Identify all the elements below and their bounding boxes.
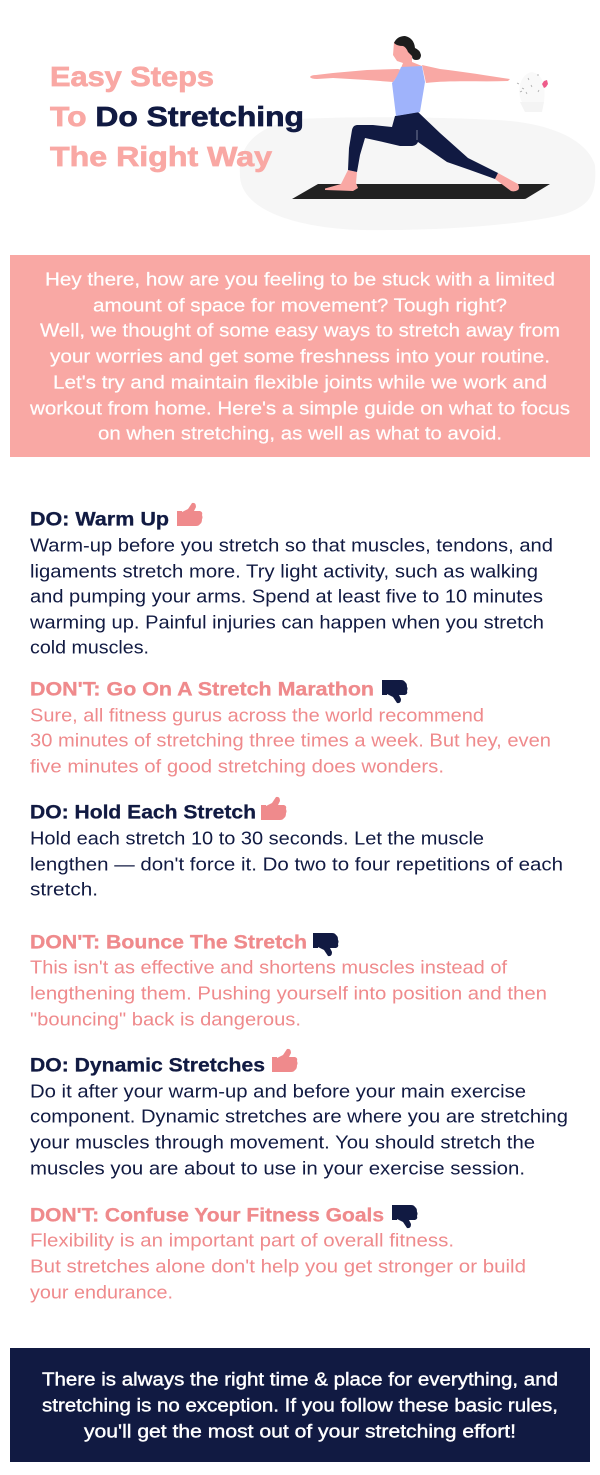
body text: ligaments stretch more. Try light activity, such as walking xyxy=(30,561,538,582)
conclusion text: There is always the right time & place for everything, and xyxy=(42,1369,558,1390)
icon: thumbs down xyxy=(382,680,408,703)
body text: lengthening them. Pushing yourself into position and then xyxy=(30,983,547,1004)
heading: DO: Hold Each Stretch xyxy=(30,802,256,824)
title: Easy Steps xyxy=(50,61,214,92)
icon: thumbs up xyxy=(261,797,286,820)
heading: DON'T: Go On A Stretch Marathon xyxy=(30,679,374,701)
section: do dynamic stretches xyxy=(30,1049,568,1179)
title: To Do Stretching xyxy=(50,101,304,132)
body text: "bouncing" back is dangerous. xyxy=(30,1009,301,1030)
body text: and pumping your arms. Spend at least five to 10 minutes xyxy=(30,586,543,607)
body text: muscles you are about to use in your exercise session. xyxy=(30,1158,525,1179)
panel: conclusion xyxy=(10,1348,590,1462)
body text: warming up. Painful injuries can happen when you stretch xyxy=(29,612,544,633)
body text: Warm-up before you stretch so that muscles, tendons, and xyxy=(30,535,553,556)
body text: five minutes of good stretching does wonders. xyxy=(30,756,444,777)
body text: your endurance. xyxy=(30,1282,173,1303)
icon: thumbs up xyxy=(272,1049,298,1072)
heading: DO: Warm Up xyxy=(30,509,169,531)
title: The Right Way xyxy=(50,141,272,172)
section: do hold each stretch xyxy=(30,797,563,900)
body text: lengthen — don't force it. Do two to four repetitions of each xyxy=(30,854,563,875)
section: don't confuse your fitness goals xyxy=(30,1205,526,1303)
intro text: your worries and get some freshness into your routine. xyxy=(50,346,550,367)
section: don't bounce the stretch xyxy=(30,932,547,1030)
body text: 30 minutes of stretching three times a week. But hey, even xyxy=(30,730,551,751)
icon: thumbs down xyxy=(313,933,338,956)
body text xyxy=(30,957,547,1030)
intro text: workout from home. Here's a simple guide on what to focus xyxy=(29,398,570,419)
body text: This isn't as effective and shortens muscles instead of xyxy=(30,957,508,978)
illustration: woman doing warrior yoga pose xyxy=(240,36,595,230)
cactus plant xyxy=(517,72,548,112)
panel: introduction xyxy=(10,255,590,457)
body text: stretch. xyxy=(30,879,98,900)
body text: your muscles through movement. You should stretch the xyxy=(30,1132,535,1153)
heading: DON'T: Confuse Your Fitness Goals xyxy=(30,1205,384,1227)
yoga mat xyxy=(292,184,550,199)
body text: Hold each stretch 10 to 30 seconds. Let the muscle xyxy=(30,828,484,849)
intro text: Well, we thought of some easy ways to stretch away from xyxy=(40,320,560,341)
intro text: Hey there, how are you feeling to be stuck with a limited xyxy=(45,269,555,290)
body text xyxy=(30,1230,526,1303)
body text: Do it after your warm-up and before your main exercise xyxy=(30,1081,526,1102)
body text xyxy=(29,535,553,658)
heading: DON'T: Bounce The Stretch xyxy=(30,932,307,954)
body text xyxy=(30,828,563,900)
title xyxy=(50,61,304,172)
heading: DO: Dynamic Stretches xyxy=(30,1055,265,1077)
figure xyxy=(310,36,519,191)
icon: thumbs down xyxy=(392,1205,418,1228)
intro text xyxy=(29,269,570,444)
body text: Sure, all fitness gurus across the world recommend xyxy=(30,705,484,726)
body text: But stretches alone don't help you get stronger or build xyxy=(30,1256,526,1277)
body text: cold muscles. xyxy=(30,637,149,658)
intro text: Let's try and maintain flexible joints while we work and xyxy=(53,372,547,393)
body text: component. Dynamic stretches are where you are stretching xyxy=(30,1106,568,1127)
intro text: amount of space for movement? Tough right? xyxy=(93,295,507,316)
body text xyxy=(30,705,551,777)
section: do warm up xyxy=(29,503,553,658)
conclusion text: stretching is no exception. If you follow these basic rules, xyxy=(42,1395,558,1416)
grey background blob xyxy=(240,117,595,230)
body text xyxy=(30,1081,568,1179)
section: don't go on a stretch marathon xyxy=(30,679,551,777)
conclusion text xyxy=(42,1369,558,1442)
body text: Flexibility is an important part of overall fitness. xyxy=(30,1230,454,1251)
conclusion text: you'll get the most out of your stretching effort! xyxy=(84,1421,516,1442)
icon: thumbs up xyxy=(177,503,202,526)
intro text: on when stretching, as well as what to avoid. xyxy=(98,423,502,444)
